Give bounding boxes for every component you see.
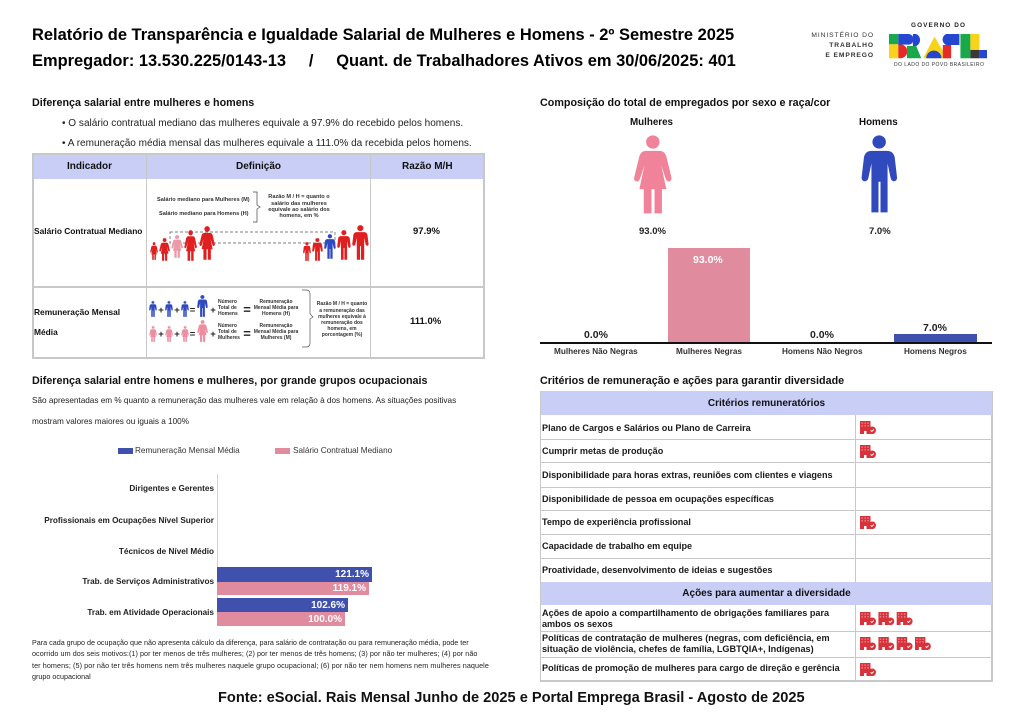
row: Proatividade, desenvolvimento de ideias e sugestões <box>542 565 772 575</box>
legend: Salário Contratual Mediano <box>293 446 392 455</box>
diagram: salário mediano: Razão M / H = quanto o <box>268 194 330 200</box>
diagram: remuneração média: = <box>243 326 251 341</box>
icon: building <box>860 663 876 676</box>
diagram: remuneração média: Número <box>218 323 237 329</box>
table: critérios <box>540 391 993 682</box>
source: Fonte: eSocial. Rais Mensal Junho de 2025 e Portal Emprega Brasil - Agosto de 2025 <box>218 690 805 706</box>
bar chart: composition <box>540 248 992 356</box>
diagram: remuneração média: Remuneração <box>259 299 293 305</box>
bar: 121.1% <box>217 567 372 582</box>
diagram: salário mediano <box>150 192 369 261</box>
diagram: remuneração média: Homens (H) <box>262 311 290 317</box>
diagram: salário mediano: homens, em % <box>279 213 319 219</box>
bar: mulheres negras <box>668 248 750 342</box>
bar: 119.1% <box>217 582 369 595</box>
bar value: 7.0% <box>923 322 947 334</box>
row: Tempo de experiência profissional <box>542 517 691 527</box>
heading: critérios: Critérios de remuneração e ações para garantir diversidade <box>540 375 844 387</box>
bar: 100.0%: 100.0% <box>308 614 342 625</box>
bar: homens negros <box>894 334 977 342</box>
diagram: remuneração média: + <box>210 329 216 340</box>
logo: ministry: TRABALHO <box>829 42 874 49</box>
diagram: remuneração média: = <box>243 302 251 317</box>
diagram: salário mediano: Salário mediano para Mulheres (M) <box>157 197 250 203</box>
axis labels <box>554 347 967 356</box>
axis labels: Homens Negros <box>904 347 967 356</box>
diagram: remuneração média: Total de <box>218 329 237 335</box>
diagram: remuneração média: + <box>158 329 164 340</box>
row label: remuneração: Média <box>34 327 58 337</box>
row: Políticas de promoção de mulheres para cargo de direção e gerência <box>542 663 840 673</box>
bar: 100.0% <box>217 612 345 626</box>
row: Cumprir metas de produção <box>542 446 663 456</box>
diagram: salário mediano: Salário mediano para Homens (H) <box>159 211 249 217</box>
bar chart: occupational groups: Profissionais em Ocupações Nível Superior <box>44 516 214 525</box>
diagram: remuneração média: Homens <box>218 311 238 317</box>
row: situação de violência, chefes de família, LGBTQIA+, Indígenas) <box>542 644 814 654</box>
diagram: remuneração média: + <box>158 305 164 316</box>
table: indicadores <box>32 153 485 359</box>
diagram: remuneração média: Mensal Média para <box>254 305 298 311</box>
diagram: remuneração média: + <box>174 329 180 340</box>
row: Plano de Cargos e Salários ou Plano de Carreira <box>542 423 751 433</box>
text: footnote <box>32 638 489 681</box>
row: Políticas de contratação de mulheres (negras, com deficiência, em <box>542 633 830 643</box>
bar chart: occupational groups: Trab. de Serviços Administrativos <box>82 577 214 586</box>
diagram: remuneração média: Mensal Média para <box>254 329 298 335</box>
diagram: remuneração média: homens, em <box>327 326 357 332</box>
diagram: remuneração média: Mulheres (M) <box>261 335 292 341</box>
row: Capacidade de trabalho em equipe <box>542 541 692 551</box>
diagram: remuneração média: Remuneração <box>259 323 293 329</box>
diagram: remuneração média: porcentagem (%) <box>322 332 363 338</box>
row: Disponibilidade para horas extras, reuniões com clientes e viagens <box>542 470 833 480</box>
diagram: salário mediano: salário das mulheres <box>271 201 327 207</box>
icon: building <box>860 445 876 458</box>
diagram: remuneração média: Número <box>218 299 237 305</box>
text: intro: São apresentadas em % quanto a remuneração das mulheres vale em relação à dos homens. As situações positivas <box>32 396 456 405</box>
icon: woman <box>634 135 672 214</box>
logo: governo do Brasil: GOVERNO DO <box>911 22 966 29</box>
diagram: remuneração média <box>149 290 367 348</box>
legend: Remuneração Mensal Média <box>135 446 240 455</box>
diagram: remuneração média: Razão M / H = quanto <box>317 301 367 307</box>
bar: 102.6% <box>217 598 348 612</box>
row label: salário: Salário Contratual Mediano <box>34 226 142 236</box>
bar: 121.1%: 121.1% <box>335 569 369 580</box>
header: ações: Ações para aumentar a diversidade <box>682 588 851 599</box>
icons: 3 buildings <box>860 612 912 625</box>
logo: ministry <box>811 31 874 59</box>
axis labels: Mulheres Não Negras <box>554 347 638 356</box>
heading: composição: Composição do total de empregados por sexo e raça/cor <box>540 97 830 109</box>
diagram: remuneração média: = <box>190 329 196 340</box>
bar value: 0.0% <box>810 329 834 341</box>
diagram: remuneração média: = <box>190 305 196 316</box>
value: 93.0% women: 93.0% <box>639 226 666 237</box>
row <box>542 608 830 628</box>
diagram: remuneração média: + <box>210 305 216 316</box>
row label: remuneração: Remuneração Mensal <box>34 307 120 317</box>
legend <box>118 446 392 455</box>
bar chart: occupational groups: Trab. em Atividade Operacionais <box>87 608 214 617</box>
icons: 4 buildings <box>860 637 931 650</box>
diagram: salário mediano: equivale ao salário dos <box>268 207 330 213</box>
axis labels: Homens Não Negros <box>782 347 863 356</box>
value: 7.0% men: 7.0% <box>869 226 891 237</box>
diagram: remuneração média: mulheres equivale à <box>318 314 366 320</box>
employer line: Empregador: 13.530.225/0143-13 / Quant. de Trabalhadores Ativos em 30/06/2025: 401 <box>32 52 736 70</box>
axis labels: Mulheres Negras <box>676 347 742 356</box>
text: footnote: ocorrido um dos seis motivos:(1) por ter menos de três mulheres; (2) por ter menos de três homens; (3) por não ter mulheres; (4) por não <box>32 649 477 658</box>
bar: 102.6%: 102.6% <box>311 600 345 611</box>
header: critérios remuneratórios <box>541 391 992 415</box>
icon: man <box>862 135 898 212</box>
text: bullet points <box>62 118 472 149</box>
table header: Definição <box>236 161 281 172</box>
diagram: remuneração média: Mulheres <box>218 335 240 341</box>
bar value: 93.0% <box>693 254 723 266</box>
value: 111.0%: 111.0% <box>410 316 441 327</box>
label: homens: Homens <box>859 117 898 128</box>
bar: 119.1%: 119.1% <box>333 583 366 594</box>
text: footnote: ter homens; (5) por não ter três homens nem três mulheres naquele grupo ocupacional; (6) por não ter nem homens nem mulheres naquele <box>32 661 489 670</box>
text: bullet points: • O salário contratual mediano das mulheres equivale a 97.9% do recebido pelos homens. <box>62 118 463 129</box>
logo: ministry: MINISTÉRIO DO <box>811 32 874 39</box>
row: Ações de apoio a compartilhamento de obrigações familiares para <box>542 608 829 618</box>
icon: building <box>860 516 876 529</box>
text: intro <box>32 396 456 426</box>
row <box>542 633 830 654</box>
logo: governo do Brasil <box>889 22 987 68</box>
logo: ministry: E EMPREGO <box>825 52 874 59</box>
text: footnote: Para cada grupo de ocupação que não apresenta cálculo da diferença, para salário de contratação ou para remuneração média, pode ter <box>32 638 469 647</box>
text: bullet points: • A remuneração média mensal das mulheres equivale a 111.0% da recebida pelos homens. <box>62 138 472 149</box>
header: ações <box>541 582 992 605</box>
text: footnote: grupo ocupacional <box>32 672 91 681</box>
table header <box>34 155 483 179</box>
row label: remuneração <box>34 307 120 337</box>
diagram: remuneração média: a remuneração das <box>319 308 365 314</box>
bar chart: occupational groups: Dirigentes e Gerentes <box>129 484 214 493</box>
diagram: remuneração média: + <box>174 305 180 316</box>
table header: Razão M/H <box>402 161 453 172</box>
row: Disponibilidade de pessoa em ocupações específicas <box>542 494 774 504</box>
bar value: 0.0% <box>584 329 608 341</box>
title: Relatório de Transparência e Igualdade Salarial de Mulheres e Homens - 2º Semestre 2025 <box>32 26 734 44</box>
bar chart: occupational groups: Técnicos de Nível Médio <box>119 547 214 556</box>
value: 97.9%: 97.9% <box>413 226 440 237</box>
label: mulheres: Mulheres <box>630 117 673 128</box>
table header: Indicador <box>67 161 112 172</box>
diagram: remuneração média: Total de <box>218 305 237 311</box>
bar chart: occupational groups <box>44 474 372 626</box>
header: critérios remuneratórios: Critérios remuneratórios <box>708 398 825 409</box>
text: intro: mostram valores maiores ou iguais a 100% <box>32 416 189 426</box>
row: ambos os sexos <box>542 618 613 628</box>
heading: grupos ocupacionais: Diferença salarial entre homens e mulheres, por grande grupos ocupacionais <box>32 375 427 387</box>
icon: building <box>860 421 876 434</box>
logo: governo do Brasil: DO LADO DO POVO BRASILEIRO <box>894 62 984 68</box>
diagram: remuneração média: remuneração dos <box>321 320 363 326</box>
heading: diferença salarial: Diferença salarial entre mulheres e homens <box>32 97 254 109</box>
